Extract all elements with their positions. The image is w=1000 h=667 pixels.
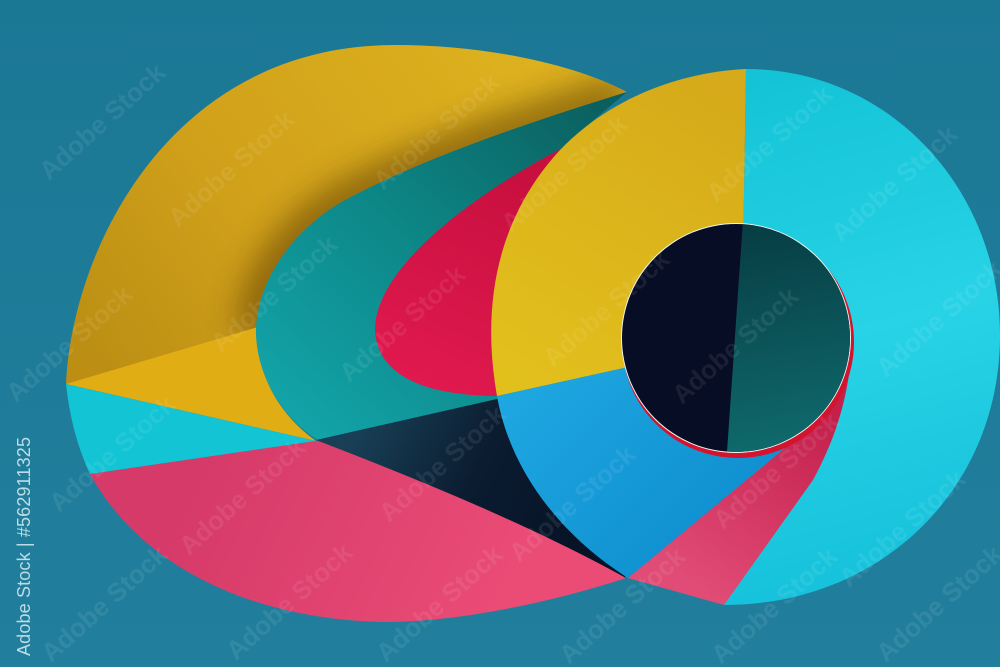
watermark: Adobe Stock	[705, 541, 843, 667]
left shape: cyan wedge	[66, 384, 316, 474]
watermark: Adobe Stock	[666, 281, 804, 410]
stock id label: Adobe Stock | #562911325	[14, 437, 34, 656]
watermark: Adobe Stock	[205, 229, 343, 358]
navy triangle	[316, 396, 626, 578]
right circle: cyan sector	[724, 69, 1000, 605]
left shape: pink lower panel	[90, 430, 626, 622]
red inner curve panel	[375, 144, 570, 396]
watermark: Adobe Stock	[373, 399, 511, 528]
watermark: Adobe Stock	[833, 464, 971, 593]
left shape: dark yellow upper panel	[66, 45, 627, 384]
watermark: Adobe Stock	[370, 539, 508, 667]
watermark: Adobe Stock	[333, 259, 471, 388]
watermark: Adobe Stock	[43, 389, 181, 518]
red crescent	[622, 226, 854, 458]
central circle: teal half	[727, 224, 850, 452]
watermark: Adobe Stock	[173, 432, 311, 561]
right circle	[491, 69, 1000, 605]
watermark: Adobe Stock	[553, 541, 691, 667]
teal inner curve panel	[256, 92, 627, 440]
watermark: Adobe Stock	[537, 244, 675, 373]
watermark: Adobe Stock	[700, 79, 838, 208]
watermark: Adobe Stock	[162, 104, 300, 233]
right circle: pink sector	[628, 338, 852, 605]
right circle: yellow sector	[491, 69, 746, 396]
central circle	[620, 220, 860, 460]
watermark: Adobe Stock	[707, 406, 845, 535]
watermark: Adobe Stock	[825, 119, 963, 248]
watermark: Adobe Stock	[0, 279, 138, 408]
watermark: Adobe Stock	[220, 537, 358, 666]
right circle: blue sector	[497, 338, 785, 578]
watermark: Adobe Stock	[503, 439, 641, 568]
watermark: Adobe Stock	[35, 539, 173, 667]
left shape: bright yellow wedge	[66, 327, 316, 441]
watermark: Adobe Stock	[495, 109, 633, 238]
central circle: navy half	[620, 220, 852, 460]
watermark: Adobe Stock	[33, 57, 171, 186]
watermark: Adobe Stock	[367, 67, 505, 196]
